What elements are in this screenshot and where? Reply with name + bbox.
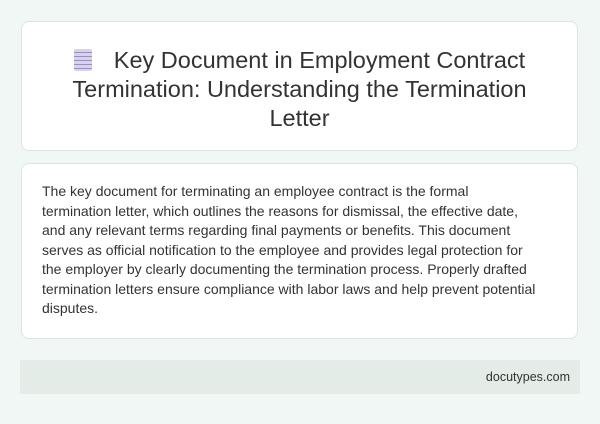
icon: document [74, 49, 92, 71]
title: Key Document in Employment Contract Termination: Understanding the Termination Letter [72, 47, 527, 131]
panel: title card [21, 21, 578, 151]
footer: docutypes.com [486, 370, 570, 384]
footer [20, 360, 580, 394]
panel: description [21, 163, 578, 339]
text block: The key document for terminating an employee contract is the formal termination letter, which outlines the reasons for dismissal, the effective date, and any relevant terms regarding final payments or benefits. This document serves as official notification to the employee and provides legal protection for the employer by clearly documenting the termination process. Properly drafted termination letters ensure compliance with labor laws and help prevent potential disputes. [42, 183, 535, 316]
